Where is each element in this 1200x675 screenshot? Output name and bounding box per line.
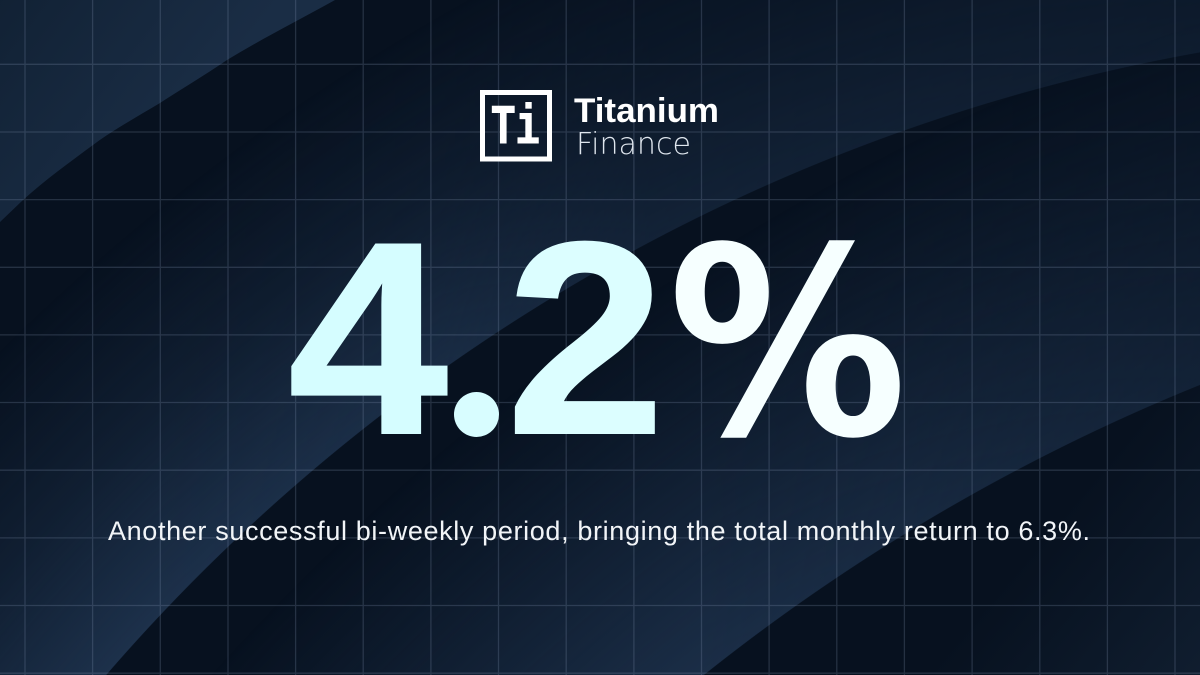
- headline figure: 4.2%: 4: [288, 185, 450, 492]
- headline figure: 4.2%: [288, 185, 907, 496]
- logo wordmark: Finance: Finance: [576, 127, 691, 162]
- logo: Titanium Finance: [482, 92, 719, 162]
- headline figure: 4.2%: .: [449, 249, 505, 472]
- logo wordmark: Titanium: Titanium: [574, 92, 719, 130]
- headline figure: 4.2%: %: [668, 192, 907, 496]
- headline figure: 4.2%: 2: [506, 186, 665, 492]
- icon: Ti square mark: Ti: [491, 96, 540, 160]
- subtitle: Another successful bi-weekly period, bringing the total monthly return to 6.3%.: [108, 516, 1090, 546]
